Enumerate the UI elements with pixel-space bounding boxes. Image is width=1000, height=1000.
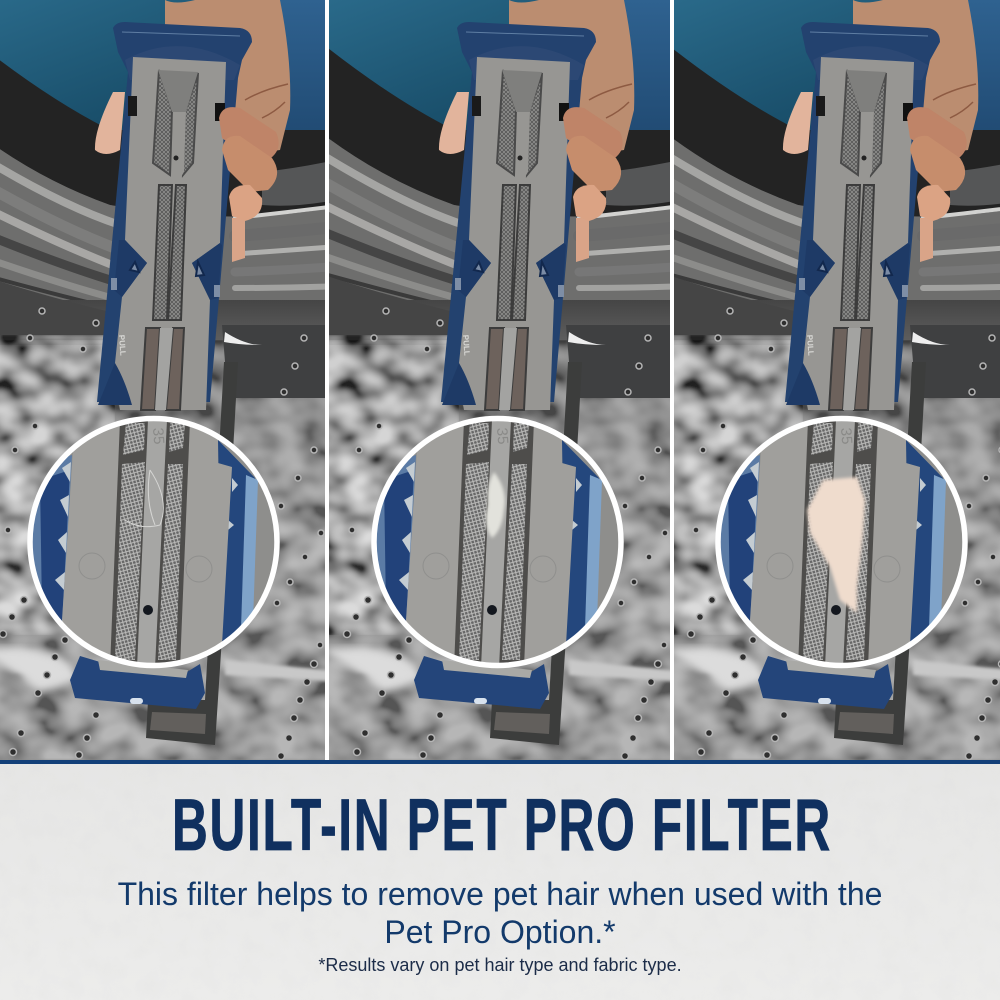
blue lint filter held in hand bbox=[758, 22, 967, 709]
magnified lens: hair clump on filter bbox=[713, 415, 973, 672]
photo panel: filter with a large clump of pet hair bbox=[668, 0, 1000, 760]
washer drum background bbox=[668, 0, 1000, 760]
photo panel: filter with no pet hair bbox=[0, 0, 350, 760]
description: This filter helps to remove pet hair when used with the bbox=[118, 876, 882, 912]
title: BUILT-IN PET PRO FILTER bbox=[172, 785, 830, 866]
washer drum background bbox=[0, 0, 350, 760]
photo panel: filter with some pet hair bbox=[324, 0, 694, 760]
description bbox=[118, 876, 882, 950]
magnified lens: clean filter bbox=[25, 415, 285, 672]
blue lint filter held in hand bbox=[70, 22, 279, 709]
magnified lens: light hair on filter bbox=[369, 415, 629, 672]
bottom caption band bbox=[0, 760, 1000, 1000]
washer drum background bbox=[324, 0, 694, 760]
blue lint filter held in hand bbox=[414, 22, 623, 709]
footnote: *Results vary on pet hair type and fabric type. bbox=[318, 955, 682, 975]
description: Pet Pro Option.* bbox=[384, 914, 616, 950]
